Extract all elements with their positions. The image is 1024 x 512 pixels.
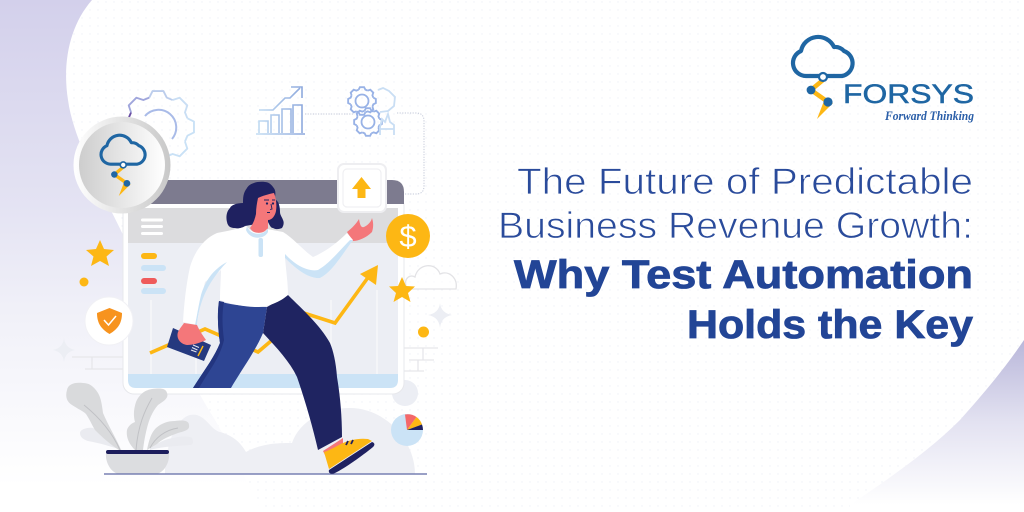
hair: [226, 182, 284, 229]
sidebar pills: [141, 253, 166, 294]
logo: Forsys: Forward Thinking: [884, 109, 974, 123]
plant in pot: [66, 383, 193, 474]
grey circle behind window: [392, 380, 418, 406]
icon: outline gear: [122, 91, 194, 163]
sparkles: [53, 303, 452, 362]
icon: growth bar chart outline: [256, 87, 305, 134]
panel: browser window: [123, 180, 404, 394]
shirt shading: [195, 226, 353, 325]
icon: shield badge: [85, 297, 133, 345]
logo: Forsys: [793, 37, 974, 123]
window title bar: [140, 180, 404, 204]
icon: outline cloud: [406, 266, 456, 289]
shirt: [183, 226, 353, 325]
shoe: [324, 439, 374, 474]
badge: logo circle: [74, 116, 170, 214]
title: Why Test Automation: [514, 253, 973, 297]
left hand: [177, 323, 206, 345]
neck and face: [250, 193, 276, 233]
face details: [264, 200, 275, 212]
chart line with arrow: [150, 265, 378, 353]
menu icon: [141, 218, 163, 235]
logo: Forsys: FORSYS: [843, 79, 974, 109]
connector: dotted lines: [305, 113, 424, 194]
yellow dots: [80, 278, 429, 338]
icon: dollar coin: [386, 214, 430, 258]
book: [167, 328, 211, 361]
front leg: [193, 301, 267, 388]
title: Holds the Key: [687, 303, 974, 347]
ground line: [104, 473, 427, 475]
icon: dollar coin: $: [399, 219, 417, 254]
right hand: [347, 218, 373, 241]
back leg: [263, 295, 342, 450]
trouser shade: [193, 301, 224, 388]
sock: [323, 438, 343, 457]
icon: gears outline with hand: [348, 87, 395, 136]
title: The Future of Predictable: [517, 161, 973, 202]
decorative brick lines: [72, 348, 438, 371]
title: [498, 161, 974, 347]
icon: star right: [389, 277, 415, 302]
woman figure: [167, 182, 374, 474]
background bush shape: [165, 408, 415, 474]
gear inner arc: [145, 110, 176, 139]
icon: pie chart: [391, 414, 423, 446]
icon: star left: [86, 240, 114, 266]
title: Business Revenue Growth:: [498, 205, 973, 246]
icon: arrow up card: [338, 164, 386, 212]
